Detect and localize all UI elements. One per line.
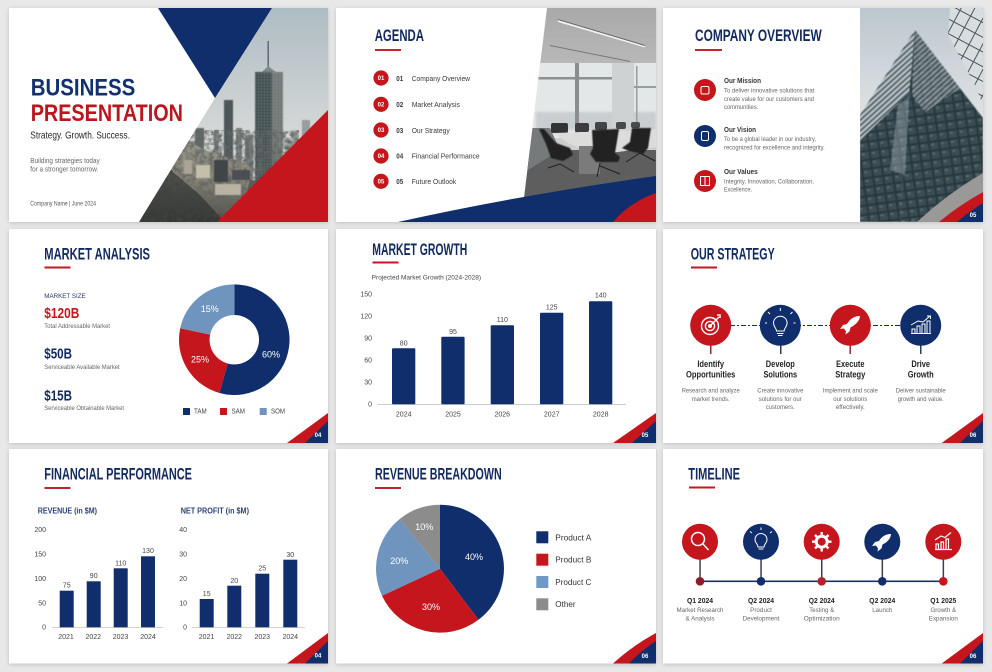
net profit chart: 20 [179,576,187,583]
milestone: Q1 2025: Expansion [929,615,958,622]
net profit chart [179,506,305,641]
agenda list: Future Outlook [412,179,457,186]
page corner [287,633,328,664]
panel: timeline [663,449,983,664]
step 1: identify opportunities: market trends. [692,396,730,403]
milestone: Q2 2024 testing [804,524,840,622]
bar chart: 80 [400,340,408,348]
milestone: Q2 2024 product [743,524,780,622]
item: our mission [694,76,815,111]
panel: company overview [663,8,983,222]
revenue chart: 90 [90,573,98,580]
agenda list: Market Analysis [412,102,460,109]
shape: red corner [613,193,656,222]
step 3: execute strategy [823,305,878,411]
market size stats: Total Addressable Market [44,323,110,330]
company and date: Company Name | June 2024 [30,202,97,208]
panel: financial performance [9,449,328,664]
dashed connector [730,324,902,326]
milestone: Q1 2024: Q1 2024 [687,596,714,605]
pie chart [376,505,504,633]
heading: OUR STRATEGY [691,245,775,263]
step 1: identify opportunities: Opportunities [686,370,735,380]
pie legend: Other [555,599,576,609]
bar chart: 2025 [445,411,461,418]
item: our vision: Our Vision [724,125,756,134]
step 4: drive growth: Growth [908,370,934,380]
heading: MARKET GROWTH [372,241,467,259]
photo: glass building [860,8,983,222]
panel: our strategy [663,229,983,443]
item: our mission: To deliver innovative solutions that [724,88,815,95]
donut legend: SAM [232,408,245,416]
heading: TIMELINE [688,466,740,484]
chart subtitle: Projected Market Growth (2024-2028) [372,275,481,282]
revenue chart [34,506,163,641]
agenda list: 04 [378,154,385,160]
heading: REVENUE BREAKDOWN [375,466,502,484]
photo: city skyline [139,8,328,222]
agenda list: 01 [378,76,385,82]
revenue chart: REVENUE (in $M) [38,506,97,515]
revenue chart: 130 [142,548,154,555]
step 2: develop solutions [757,305,804,411]
timeline axis [700,580,943,582]
milestone: Q2 2024 product: Q2 2024 [748,596,775,605]
agenda list: Our Strategy [412,128,450,135]
item: our mission: create value for our customers and [724,96,815,103]
tagline: Strategy. Growth. Success. [30,130,130,141]
agenda list: Company Overview [412,76,471,83]
item: our vision [694,125,825,151]
donut legend: SOM [271,408,285,416]
net profit chart: 2021 [199,634,214,641]
bar chart: 60 [364,358,372,364]
market size stats: Serviceable Available Market [44,364,120,371]
revenue chart: 2024 [140,634,156,641]
panel: market analysis [9,229,328,443]
net profit chart: 30 [179,552,187,558]
subtitle text: Building strategies today [30,158,100,165]
agenda list: 03 [378,128,385,134]
agenda list: 04 [396,154,403,161]
title: PRESENTATION [31,100,183,127]
milestone: Q2 2024 launch [864,524,900,614]
bar chart: 2028 [593,411,609,418]
market size stats [44,293,124,412]
page corner [942,633,983,664]
milestone: Q1 2024 [676,524,724,622]
heading: MARKET ANALYSIS [44,245,150,263]
pie chart: 30% [422,602,440,612]
net profit chart: 40 [179,527,187,534]
bar chart: 125 [546,304,558,312]
bar chart: 0 [368,402,372,408]
subtitle text: for a stronger tomorrow. [30,167,98,174]
panel: agenda [336,8,660,222]
page corner [287,413,328,443]
shape: corner stripes [917,173,983,222]
step 4: drive growth [896,305,946,403]
bar chart: 140 [595,292,607,300]
net profit chart: 15 [203,591,211,598]
page corner [613,633,656,664]
step 3: execute strategy: Execute [836,359,864,369]
step 3: execute strategy: Strategy [835,370,865,380]
bar chart: 2027 [544,411,560,418]
agenda list [373,70,480,189]
icon: light bulb [750,528,772,549]
net profit chart: 2023 [255,634,270,641]
heading: COMPANY OVERVIEW [695,27,822,45]
panel: title slide [9,8,328,222]
milestone: Q2 2024 product: Development [743,615,780,622]
step 3: execute strategy: our solutions [833,396,867,403]
pie legend [536,531,592,610]
icon: magnifier [692,532,708,550]
step 3: execute strategy: Implement and scale [823,388,878,395]
revenue chart: 200 [34,527,46,534]
milestone: Q2 2024 testing: Testing & [809,607,835,614]
bar chart: 30 [364,380,372,386]
step 2: develop solutions: Create innovative [757,388,804,395]
revenue chart: 110 [115,560,126,568]
icon: growth chart [935,532,952,550]
step 4: drive growth: Deliver sustainable [896,388,946,395]
revenue chart: 100 [34,576,46,583]
icon: growth chart [911,316,931,334]
net profit chart: 2024 [283,634,298,641]
page corner: 06 [970,654,977,660]
step 1: identify opportunities: Research and analyze [682,388,740,395]
donut chart [179,284,290,395]
donut chart: 15% [201,304,219,314]
donut legend [183,408,285,416]
pie chart: 40% [465,552,483,562]
revenue chart: 50 [38,600,46,608]
shape: navy swoosh [398,176,656,222]
pie legend: Product C [555,577,591,587]
step 3: execute strategy: effectively. [836,404,865,411]
net profit chart: 2022 [227,634,242,641]
chairs [539,128,651,162]
page corner [613,413,656,443]
milestone: Q2 2024 launch: Launch [872,607,893,614]
page number: 05 [970,213,977,219]
net profit chart: 25 [258,566,266,572]
panel: revenue breakdown [336,449,656,664]
page corner [942,413,983,443]
page corner: 06 [642,654,649,660]
milestone: Q2 2024 testing: Optimization [804,615,840,622]
step 2: develop solutions: customers. [766,404,795,411]
agenda list: 03 [396,128,403,135]
photo: conference room [520,8,660,200]
icon: rocket [872,534,891,552]
bar chart: 110 [497,317,508,324]
item: our vision: To be a global leader in our industry, [724,136,816,143]
icon: rocket [840,316,860,334]
item: our values: Integrity, Innovation, Collaboration, [724,178,814,185]
net profit chart: 20 [230,578,238,585]
bar chart: 90 [364,336,372,342]
step 2: develop solutions: Develop [766,359,795,369]
net profit chart: 30 [286,552,294,559]
market size stats: Serviceable Obtainable Market [44,405,124,412]
revenue chart: 75 [63,582,71,590]
item: our mission: communities. [724,104,759,111]
milestone: Q2 2024 testing: Q2 2024 [809,596,835,605]
page corner: 04 [315,433,322,439]
subtitle text [30,158,100,174]
step 4: drive growth: Drive [911,359,930,369]
market size stats: $15B [44,387,72,404]
donut legend: TAM [194,408,207,416]
item: our values: Our Values [724,167,758,176]
donut chart: 25% [191,354,209,364]
revenue chart: 2022 [86,634,101,641]
milestone: Q1 2025 [925,524,961,622]
pie legend: Product B [555,555,592,565]
heading: AGENDA [375,27,424,45]
market size stats: MARKET SIZE [44,293,86,300]
pie chart: 10% [415,522,433,532]
milestone: Q1 2024: & Analysis [686,615,715,622]
bar chart: 150 [360,292,372,298]
panel: market growth [336,229,656,443]
icon: light bulb [765,308,796,336]
item: our values: Excellence. [724,186,752,193]
item: our vision: recognized for excellence and integrity. [724,144,825,151]
step 2: develop solutions: solutions for our [759,396,802,403]
shape: red triangle [217,110,328,222]
agenda list: 01 [396,76,403,83]
icon: target [702,315,720,334]
agenda list: 05 [378,180,385,186]
bar chart [360,292,626,418]
milestone: Q2 2024 product: Product [750,607,772,614]
agenda list: Financial Performance [412,154,480,161]
shape: navy triangle [158,8,272,98]
bar chart: 2024 [396,411,412,418]
agenda list: 02 [378,102,385,108]
pie legend: Product A [555,532,592,542]
market size stats: $50B [44,346,72,363]
net profit chart: NET PROFIT (in $M) [181,506,249,515]
title [31,74,183,127]
milestone: Q1 2024: Market Research [676,607,724,614]
net profit chart: 10 [179,600,187,608]
item: our mission: Our Mission [724,76,761,85]
step 1: identify opportunities: Identify [697,359,724,369]
revenue chart: 2021 [58,634,74,641]
icon: gear [812,532,832,552]
revenue chart: 0 [42,624,46,632]
step 1: identify opportunities [682,305,740,403]
step 2: develop solutions: Solutions [763,370,797,380]
title: BUSINESS [31,74,135,101]
net profit chart: 0 [183,624,187,632]
market size stats: $120B [44,305,79,322]
revenue chart: 150 [34,552,46,558]
item: our values [694,167,814,193]
bar chart: 120 [360,314,372,320]
milestone: Q1 2025: Q1 2025 [930,596,956,605]
page corner: 04 [315,654,322,660]
revenue chart: 2023 [113,634,128,641]
pie chart: 20% [390,556,408,566]
milestone: Q2 2024 launch: Q2 2024 [869,596,896,605]
heading: FINANCIAL PERFORMANCE [44,466,192,484]
step 4: drive growth: growth and value. [898,396,944,403]
agenda list: 05 [396,179,403,186]
bar chart: 2026 [495,411,510,418]
page corner: 05 [642,433,649,439]
donut chart: 60% [262,350,280,360]
agenda list: 02 [396,102,403,109]
bar chart: 95 [449,329,457,336]
milestone: Q1 2025: Growth & [930,607,957,614]
page corner: 06 [970,433,977,439]
